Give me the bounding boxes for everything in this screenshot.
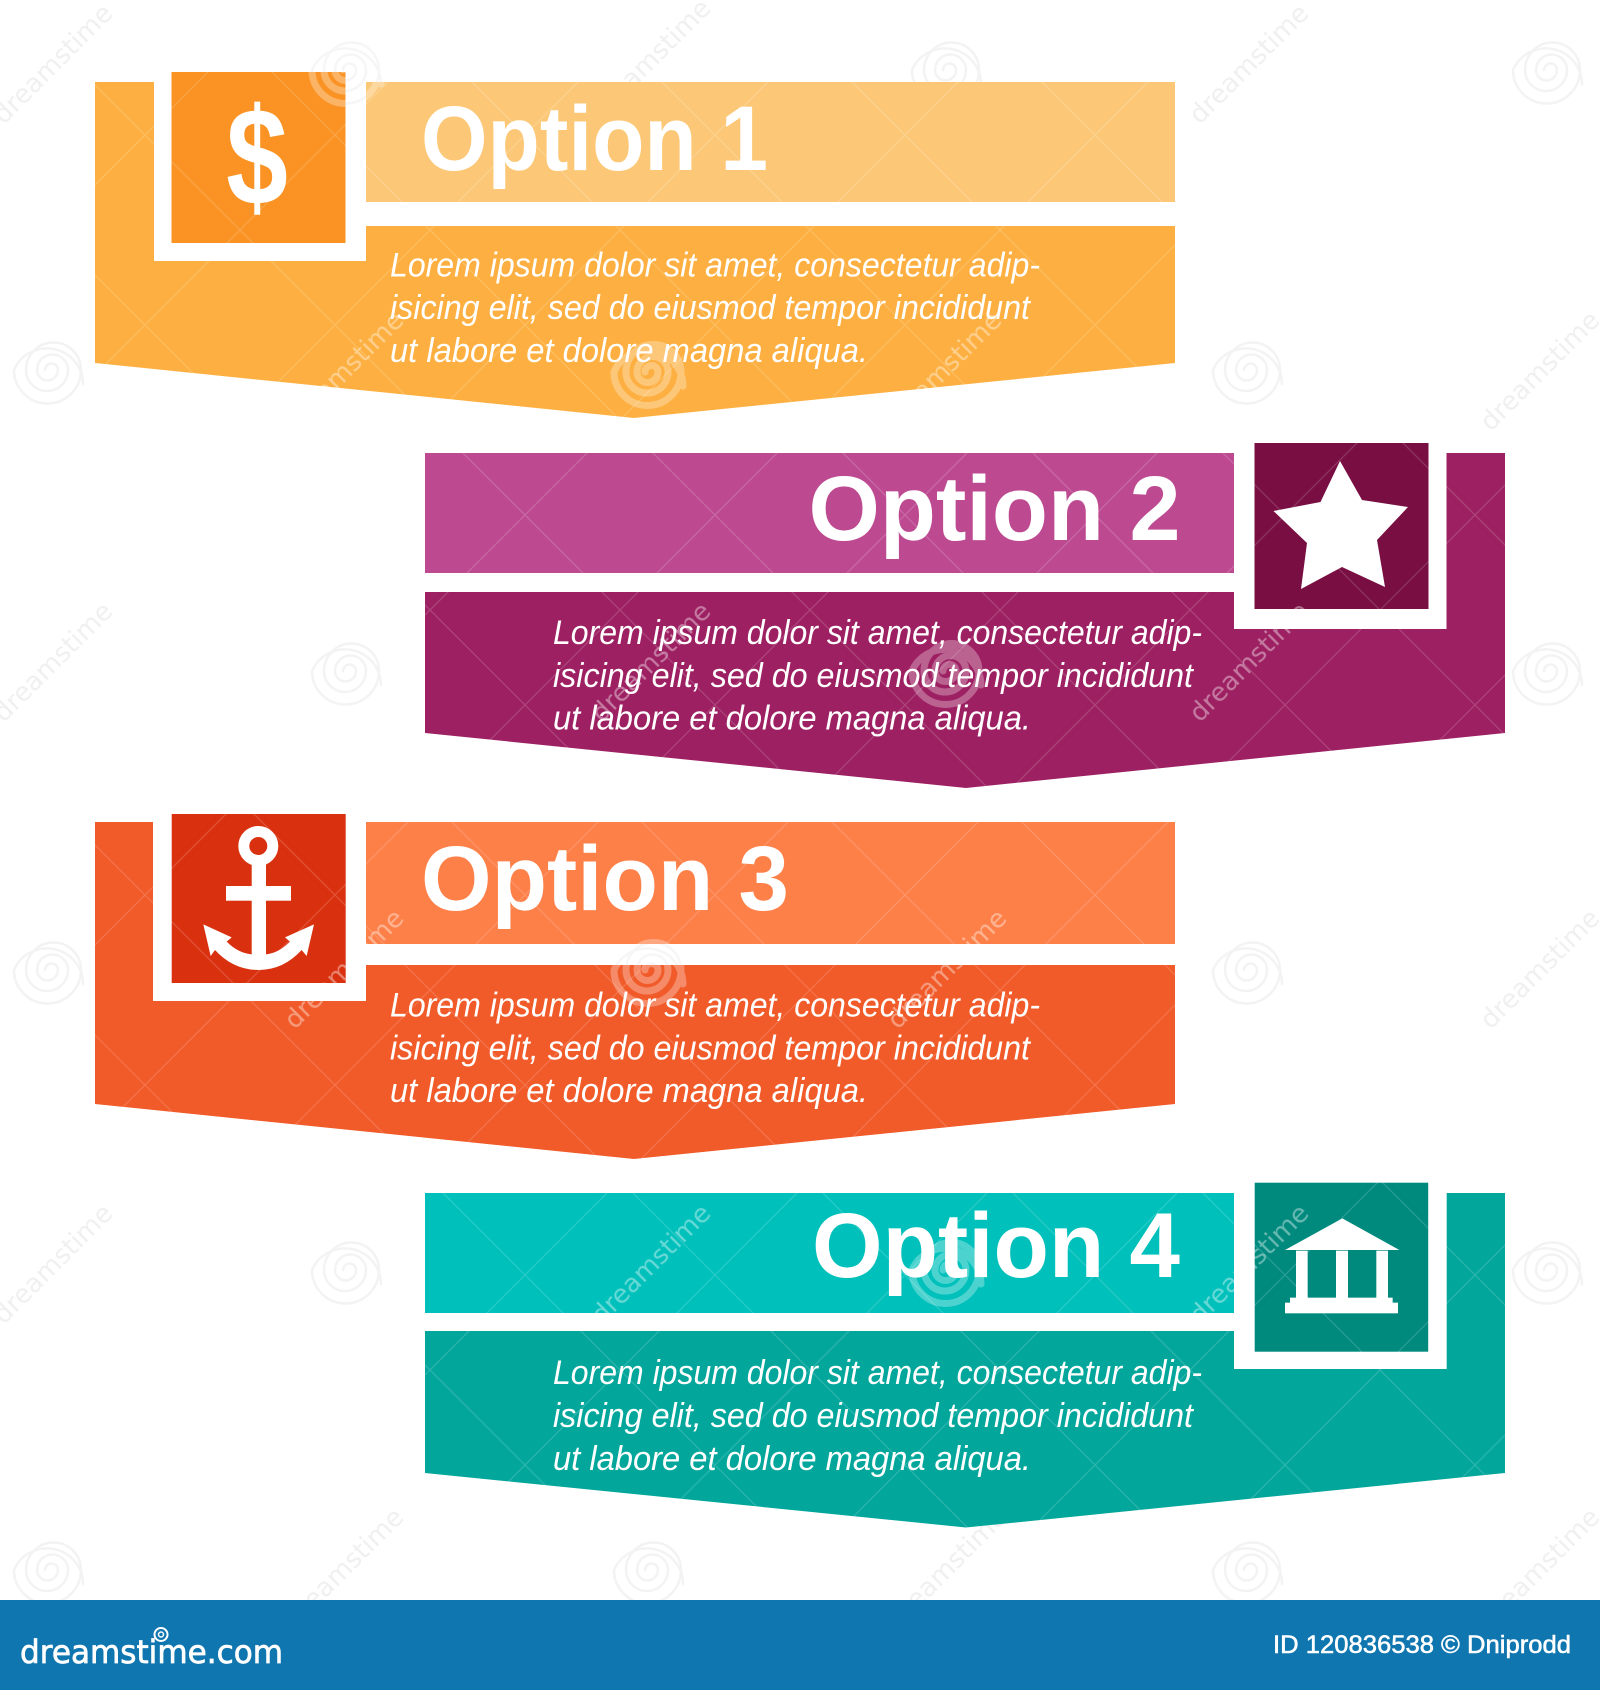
option 1 text (390, 246, 1040, 370)
panel: option 4 (425, 1183, 1505, 1528)
option 3 text: ut labore et dolore magna aliqua. (390, 1072, 868, 1110)
icon: star (1254, 443, 1428, 609)
option 2 text: Lorem ipsum dolor sit amet, consectetur adip- (553, 614, 1202, 652)
overlay watermark marks: dreamstime (1184, 597, 1315, 728)
option 3 text (390, 986, 1040, 1110)
option 3 body arrow (95, 822, 1175, 1159)
icon: dollar (172, 72, 346, 243)
option 4 text: ut labore et dolore magna aliqua. (553, 1440, 1031, 1478)
option 1 text: ut labore et dolore magna aliqua. (390, 332, 868, 370)
option 3 header band (366, 822, 1175, 944)
overlay watermark marks (279, 42, 1315, 1330)
overlay watermark marks: dreamstime (279, 904, 410, 1035)
option 3 text: Lorem ipsum dolor sit amet, consectetur adip- (390, 986, 1040, 1024)
footer bar (0, 1600, 1600, 1690)
option 1 text: isicing elit, sed do eiusmod tempor incididunt (390, 289, 1031, 327)
option 4 text (553, 1354, 1202, 1478)
overlay watermark marks: dreamstime (882, 904, 1013, 1035)
faint watermark layer: dreamstime (882, 1503, 1013, 1634)
option 2 text (553, 614, 1202, 738)
panel: option 1 (95, 72, 1175, 418)
option 2 text: isicing elit, sed do eiusmod tempor incididunt (553, 657, 1194, 695)
faint watermark layer: dreamstime (1184, 0, 1315, 130)
overlay watermark marks: dreamstime (1184, 1199, 1315, 1330)
option 1 body arrow (95, 82, 1175, 418)
footer image id and credit: ID 120836538 © Dniprodd (1273, 1631, 1571, 1659)
option 4 header band (425, 1193, 1234, 1313)
overlay watermark marks: dreamstime (586, 597, 717, 728)
icon: bank (1255, 1183, 1428, 1352)
option 1 text: Lorem ipsum dolor sit amet, consectetur adip- (390, 246, 1040, 284)
option 2 body arrow (425, 453, 1505, 788)
option 3 heading: Option 3 (421, 828, 789, 930)
option 2 heading: Option 2 (808, 458, 1180, 560)
panel: option 2 (425, 443, 1505, 788)
faint watermark layer: dreamstime (279, 1503, 410, 1634)
panel: option 3 (95, 814, 1175, 1159)
option 1 header band (366, 82, 1175, 202)
icon: anchor (172, 814, 346, 983)
option 4 text: Lorem ipsum dolor sit amet, consectetur adip- (553, 1354, 1202, 1392)
option 2 text: ut labore et dolore magna aliqua. (553, 700, 1031, 738)
overlay watermark marks: dreamstime (586, 1199, 717, 1330)
option 2 header band (425, 453, 1234, 573)
overlay watermark marks: dreamstime (279, 306, 410, 437)
option 4 text: isicing elit, sed do eiusmod tempor incididunt (553, 1397, 1194, 1435)
option 4 body arrow (425, 1193, 1505, 1528)
icon: dollar: $ (226, 79, 288, 234)
option 1 heading: Option 1 (421, 88, 768, 190)
option 4 heading: Option 4 (812, 1195, 1180, 1297)
overlay watermark marks: dreamstime (877, 306, 1008, 437)
footer logo: dreamstime.com (20, 1633, 283, 1671)
option 3 text: isicing elit, sed do eiusmod tempor incididunt (390, 1030, 1031, 1068)
